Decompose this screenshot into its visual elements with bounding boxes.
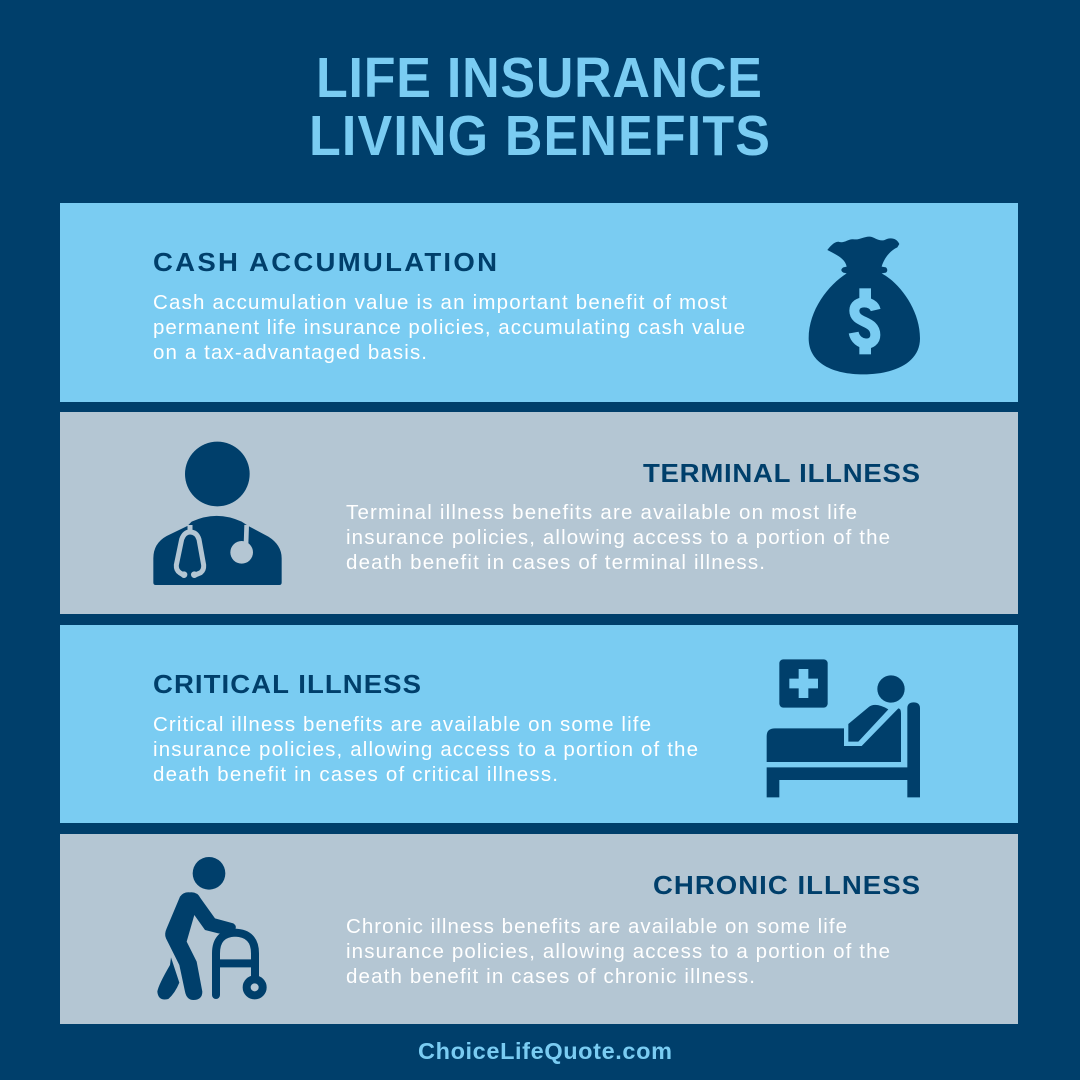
text block: terminal illness description: Terminal illness benefits are available on most life — [346, 501, 857, 524]
text block: cash accumulation description: permanent life insurance policies, accumulating cash value — [153, 316, 745, 339]
panel: cash accumulation — [60, 203, 1018, 402]
icon: patient in hospital bed — [767, 659, 920, 797]
text block: terminal illness description — [346, 501, 890, 574]
text block: cash accumulation description: Cash accumulation value is an important benefit of most — [153, 291, 727, 314]
text block: chronic illness description: insurance policies, allowing access to a portion of the — [346, 940, 890, 963]
text block: critical illness description: Critical illness benefits are available on some life — [153, 713, 651, 736]
title: LIFE INSURANCE — [316, 47, 762, 109]
text block: chronic illness description: death benefit in cases of chronic illness. — [346, 965, 755, 988]
text block: cash accumulation description: on a tax-advantaged basis. — [153, 341, 427, 364]
heading: terminal illness: TERMINAL ILLNESS — [643, 459, 920, 488]
panel: critical illness — [60, 625, 1018, 823]
panel: terminal illness — [60, 412, 1018, 614]
text block: terminal illness description: death benefit in cases of terminal illness. — [346, 551, 765, 574]
footer: website: ChoiceLifeQuote.com — [418, 1038, 672, 1064]
title — [309, 47, 770, 167]
title: LIVING BENEFITS — [309, 105, 770, 167]
text block: critical illness description: death benefit in cases of critical illness. — [153, 763, 558, 786]
text block: cash accumulation description — [153, 291, 745, 364]
heading: chronic illness: CHRONIC ILLNESS — [653, 871, 920, 900]
text block: terminal illness description: insurance policies, allowing access to a portion of the — [346, 526, 890, 549]
text block: critical illness description: insurance policies, allowing access to a portion of the — [153, 738, 698, 761]
text block: chronic illness description: Chronic illness benefits are available on some life — [346, 915, 847, 938]
panel: chronic illness — [60, 834, 1018, 1024]
icon: doctor with stethoscope — [153, 442, 282, 585]
icon: money bag — [809, 237, 920, 374]
text block: critical illness description — [153, 713, 698, 786]
heading: cash accumulation: CASH ACCUMULATION — [153, 248, 497, 277]
text block: chronic illness description — [346, 915, 890, 988]
heading: critical illness: CRITICAL ILLNESS — [153, 670, 421, 699]
icon: person with walker — [157, 857, 263, 1000]
